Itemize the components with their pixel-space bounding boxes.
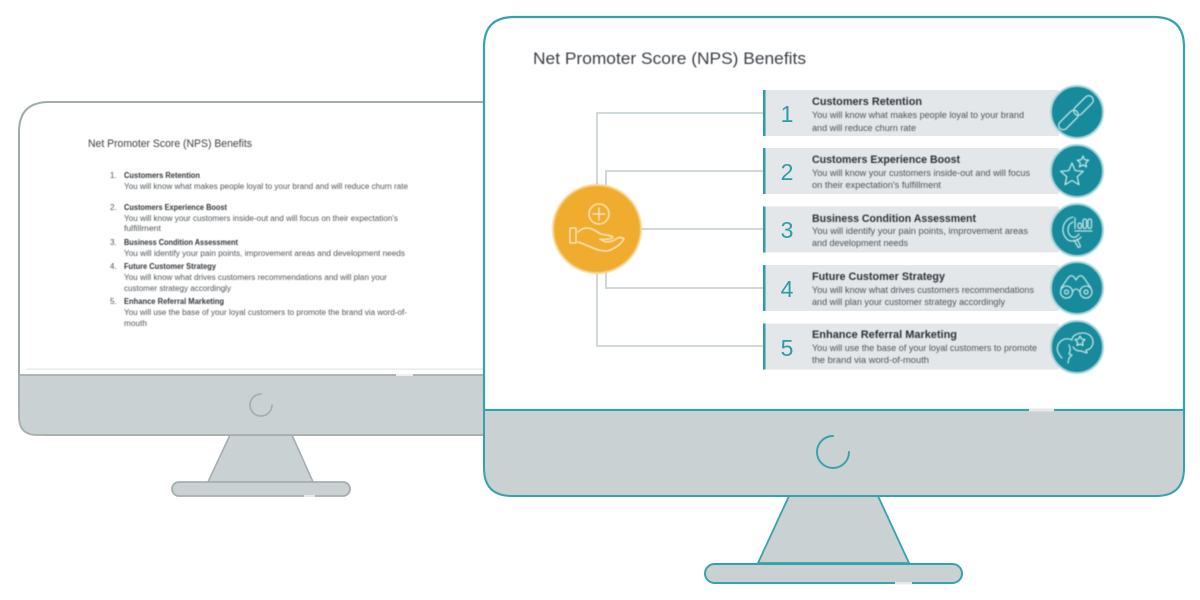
connector lines [597,113,764,346]
row 5: the brand via word-of-mouth [812,355,929,366]
right monitor stand [758,496,909,563]
left slide title: Net Promoter Score (NPS) Benefits [88,138,252,150]
left list item 3: 3. [110,238,117,247]
left list item 2: 2. [110,203,117,212]
icon: head with speech bubble star [1051,321,1103,373]
left list item 2: fulfillment [124,224,162,233]
row 3: 3 [781,217,793,243]
row 2: You will know your customers inside-out and will focus [812,168,1030,179]
left list item 3 [110,238,405,258]
row 1: Customers Retention [812,96,922,108]
left list item 4: You will know what drives customers recommendations and will plan your [124,273,387,282]
row 2: Customers Experience Boost [812,154,960,166]
row 5 [763,321,1103,373]
icon: binoculars [1051,262,1103,314]
right monitor body [484,17,1184,410]
central orange circle icon [553,185,641,273]
row 1 [763,86,1103,138]
row 1: You will know what makes people loyal to your brand [812,110,1024,121]
right monitor [484,17,1184,584]
row 2: on their expectation's fulfillment [812,180,941,191]
left list item 1: Customers Retention [124,171,200,180]
row 3 [763,204,1103,256]
left list item 5: Enhance Referral Marketing [124,297,224,306]
row 3: Business Condition Assessment [812,213,976,225]
row 5: You will use the base of your loyal customers to promote [812,343,1037,354]
left monitor base [172,482,350,496]
left list item 5: 5. [110,297,117,306]
row 4: Future Customer Strategy [812,271,946,283]
row 4: 4 [781,276,794,302]
row 2 [763,145,1103,197]
left list item 5 [110,297,407,328]
row 4: and will plan your customer strategy accordingly [812,297,1005,308]
left list item 5: mouth [124,319,147,328]
row 4 [763,262,1103,314]
left list item 1: 1. [110,171,117,180]
left list item 4: customer strategy accordingly [124,284,231,293]
icon: magnifier over chart [1051,204,1103,256]
row 5: 5 [781,335,793,361]
row 5: Enhance Referral Marketing [812,329,957,341]
left list item 3: Business Condition Assessment [124,238,238,247]
left list item 2: Customers Experience Boost [124,203,227,212]
left list item 4: Future Customer Strategy [124,262,217,271]
left list item 2: You will know your customers inside-out and will focus on their expectation's [124,214,398,223]
left slide text [88,138,409,328]
left list item 4 [110,262,387,293]
left list item 3: You will identify your pain points, improvement areas and development needs [124,249,405,258]
row 1: and will reduce churn rate [812,123,916,134]
left monitor chin [19,375,520,435]
icon: open hand [570,228,624,251]
right monitor base [705,564,962,583]
right slide title: Net Promoter Score (NPS) Benefits [533,49,806,68]
left monitor body [19,102,520,435]
icon: plus coin [589,204,609,224]
right monitor webcam ring [817,436,849,468]
right monitor chin [484,410,1184,496]
left monitor stand [208,435,313,482]
left list item 4: 4. [110,262,117,271]
icon: chain link [1051,86,1103,138]
row 1: 1 [781,101,793,127]
row 3: and development needs [812,238,908,249]
left list item 1: You will know what makes people loyal to your brand and will reduce churn rate [124,182,409,191]
row 3: You will identify your pain points, improvement areas [812,226,1028,237]
row 4: You will know what drives customers recommendations [812,285,1034,296]
left monitor [19,102,520,497]
row 2: 2 [781,159,793,185]
left list item 2 [110,203,398,233]
left list item 5: You will use the base of your loyal customers to promote the brand via word-of- [124,308,407,317]
left monitor webcam ring [250,394,272,416]
icon: stars [1051,145,1103,197]
left list item 1 [110,171,409,191]
